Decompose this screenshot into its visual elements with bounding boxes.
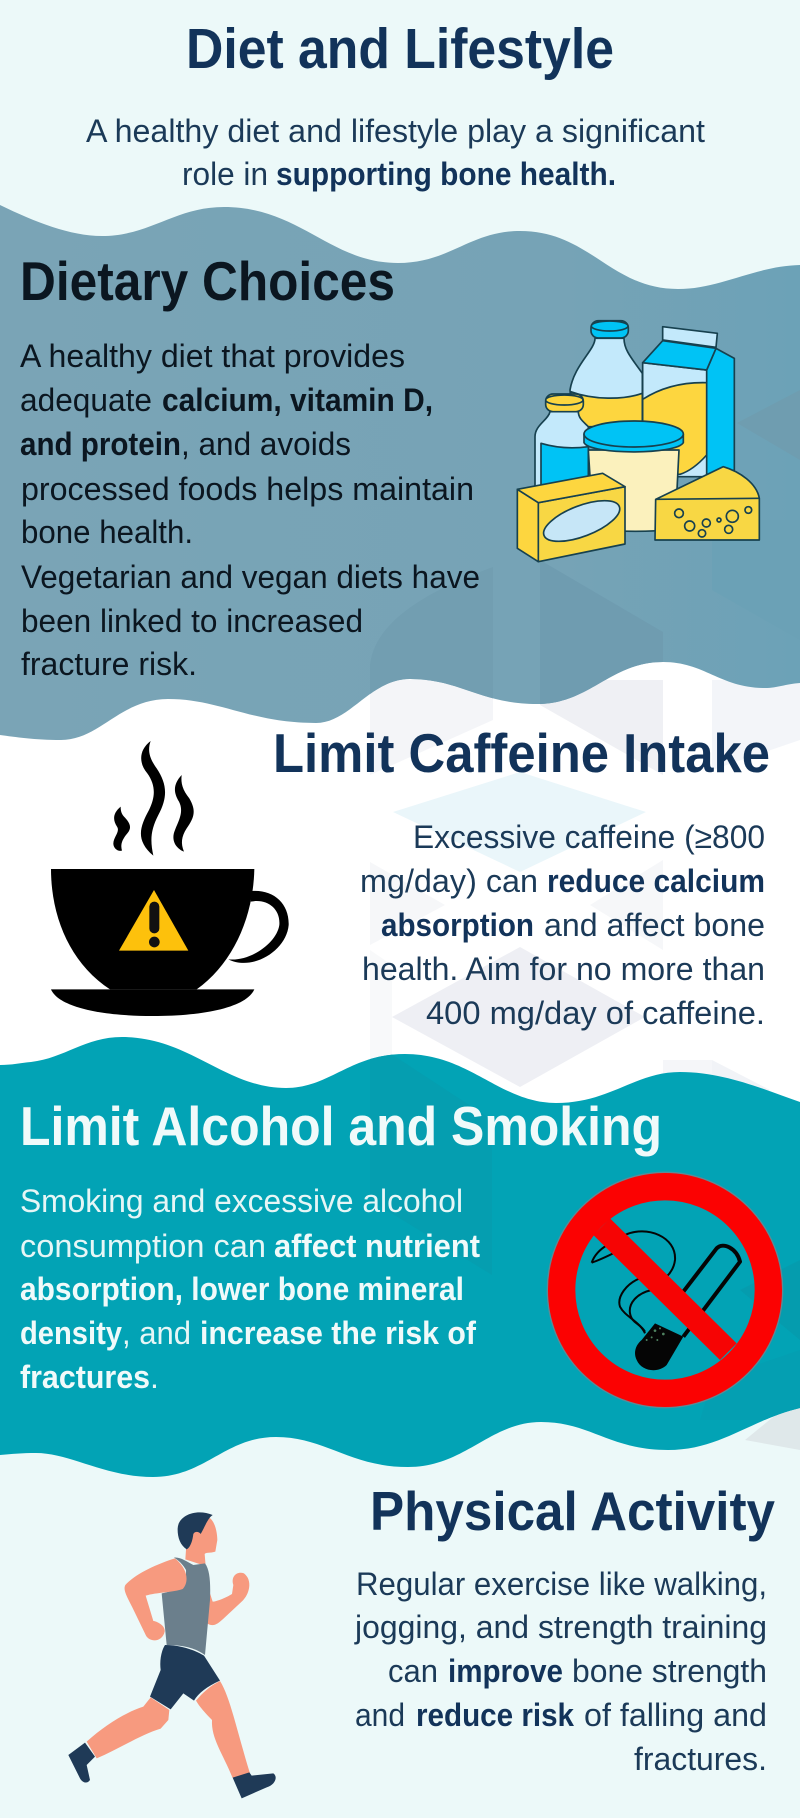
icon: butter box [517,473,625,562]
body text: and [355,1697,405,1733]
body text [360,819,765,1031]
icon: runner front leg [196,1681,250,1778]
background hexagon pattern [370,662,662,704]
icon: runner [68,1512,276,1798]
heading: Dietary Choices [20,250,395,312]
body text: fracture risk. [21,646,197,682]
background hexagon pattern [370,1040,800,1420]
icon: smoke [592,1231,675,1333]
heading: Limit Caffeine Intake [273,722,770,784]
background hexagon pattern [370,680,800,1110]
icon: yogurt jar [584,421,683,531]
body text: 400 mg/day of caffeine. [426,995,765,1031]
icon: runner shorts [150,1645,220,1709]
body text: A healthy diet that provides [20,338,405,374]
heading: Limit Alcohol and Smoking [20,1095,662,1157]
body text [20,1183,480,1395]
panel: limit caffeine intake [0,640,800,1140]
body text: can [388,1653,438,1689]
body text: , and avoids [181,426,351,462]
icon: runner back arm [125,1558,187,1640]
body text: jogging, and strength training [354,1609,767,1645]
panel: dietary choices [0,205,800,740]
body text [20,338,480,682]
icon: cigarette [635,1246,740,1370]
body text: mg/day) can [360,863,538,899]
heading: Physical Activity [370,1480,775,1542]
icon: runner shoes [68,1743,276,1798]
icon: runner back leg [87,1697,169,1758]
icon: steam [113,741,194,856]
icon: prohibition ring [548,1173,782,1407]
icon: warning triangle [119,890,188,951]
body text: absorption [381,907,534,943]
body text: and protein [20,426,181,462]
body text: calcium, vitamin D, [162,382,433,418]
body text: affect nutrient [274,1228,480,1264]
intro text [86,113,705,192]
icon: milk carton [643,327,734,477]
icon: runner hair [178,1512,213,1549]
body text: reduce calcium [547,863,765,899]
icon: runner neck and head [185,1517,217,1566]
body text: bone health. [21,514,193,550]
body text: fractures. [634,1741,767,1777]
panel: physical activity [68,1480,775,1798]
body text: processed foods helps maintain [21,471,474,507]
body text: bone strength [572,1653,767,1689]
body text: Smoking and excessive alcohol [20,1183,463,1219]
wave background [0,205,800,740]
wave background [0,1037,800,1477]
intro text: role in [182,156,268,192]
icon: coffee cup with warning sign [51,741,289,1016]
body text: fractures [20,1359,150,1395]
icon: cheese wedge [655,467,759,540]
body text: Vegetarian and vegan diets have [21,559,480,595]
icon: large milk bottle [570,321,642,427]
body text: increase the risk of [200,1315,476,1351]
panel: limit alcohol and smoking [0,1037,800,1477]
icon: no smoking sign [548,1173,782,1407]
body text: improve [448,1653,563,1689]
intro text: A healthy diet and lifestyle play a significant [86,113,705,149]
body text [354,1566,767,1777]
body text: of falling and [584,1697,767,1733]
body text: Regular exercise like walking, [356,1566,767,1602]
section background [0,640,800,1140]
body text: Excessive caffeine (≥800 [413,819,765,855]
icon: runner front arm [207,1573,249,1625]
body text: adequate [20,382,152,418]
body text: health. Aim for no more than [362,951,765,987]
icon: small bottle [535,394,588,487]
icon: runner shirt [162,1558,210,1655]
intro text: supporting bone health. [276,156,616,192]
icon: dairy products [517,321,759,562]
body text: consumption can [20,1228,266,1264]
panel: header [86,17,705,192]
body text: and affect bone [544,907,765,943]
body text: absorption, lower bone mineral [20,1271,464,1307]
body text: . [150,1359,159,1395]
body text: been linked to increased [21,603,363,639]
body text: , and [122,1315,191,1351]
body text: density [20,1315,122,1351]
body text: reduce risk [416,1697,574,1733]
icon: cup body [51,869,289,1016]
title: Diet and Lifestyle [186,17,614,81]
decorative corner behind wave [745,1395,800,1450]
